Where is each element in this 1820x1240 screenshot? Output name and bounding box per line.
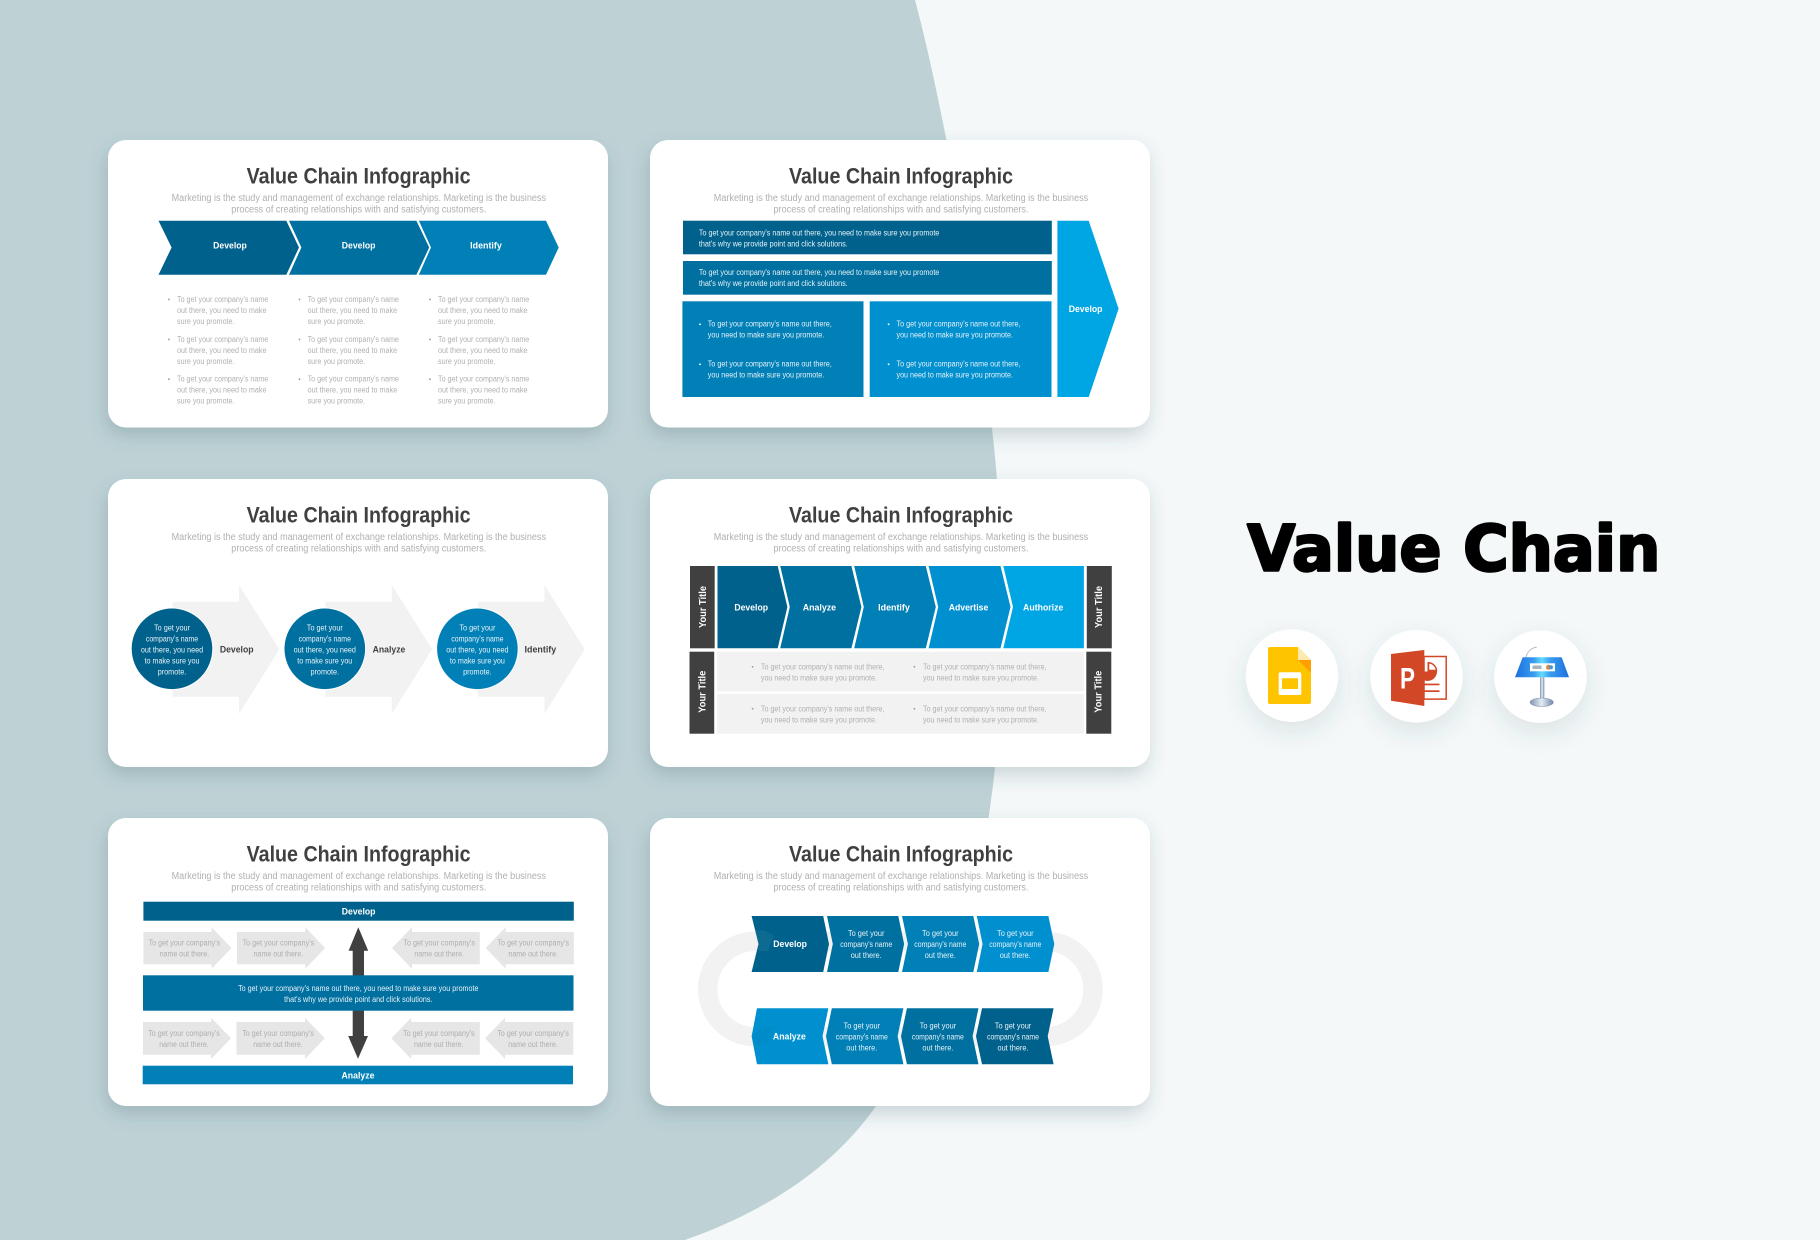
panel: card 4 five chevrons table xyxy=(650,479,1150,767)
grey loop xyxy=(708,941,1093,1037)
chevron: Analyze xyxy=(780,566,861,648)
panel: card 2 bars and large arrow xyxy=(650,140,1150,428)
intro text: process of creating relationships with and satisfying customers. xyxy=(231,544,486,555)
chevron: Develop second xyxy=(289,221,429,275)
bar: Develop xyxy=(143,902,574,921)
chevron: top step 1: out there. xyxy=(851,951,882,960)
intro text xyxy=(714,193,1088,216)
panel: card 5 bars with central double arrow xyxy=(108,818,608,1106)
grey arrow bottom 4 xyxy=(485,1018,573,1059)
bar: Analyze: Analyze xyxy=(342,1070,374,1081)
side label top left xyxy=(690,566,715,648)
step: Identify: to make sure you xyxy=(450,656,505,665)
side label top right xyxy=(1087,566,1112,648)
chevron: bottom step 3: company's name xyxy=(987,1033,1039,1042)
chevron: top step 2 xyxy=(902,916,979,972)
box left: you need to make sure you promote. xyxy=(708,371,824,380)
intro text xyxy=(172,193,546,216)
intro text: Marketing is the study and management of exchange relationships. Marketing is the business xyxy=(172,871,546,882)
intro text: Marketing is the study and management of exchange relationships. Marketing is the business xyxy=(714,871,1088,882)
bullets column 1: sure you promote. xyxy=(177,397,234,406)
heading: Value Chain Infographic xyxy=(789,163,1013,188)
bullets column 2: out there, you need to make xyxy=(308,386,398,395)
chevron: Analyze xyxy=(752,1008,828,1064)
step: Develop xyxy=(131,585,279,714)
chevron: Analyze: Analyze xyxy=(803,602,836,613)
chevron: bottom step 1 xyxy=(826,1008,903,1064)
step: Analyze: out there, you need xyxy=(294,645,356,654)
chevron: Identify: Identify xyxy=(878,602,911,613)
step: Analyze: Analyze xyxy=(373,644,405,655)
bar: Develop: Develop xyxy=(342,906,376,917)
intro text: Marketing is the study and management of exchange relationships. Marketing is the business xyxy=(172,532,546,543)
panel: card 6 loop of chevrons xyxy=(650,818,1150,1106)
step: Develop: Develop xyxy=(220,644,254,655)
step: Develop: company's name xyxy=(146,634,199,643)
step: Analyze: promote. xyxy=(310,667,339,676)
step: Develop: to make sure you xyxy=(144,656,200,665)
heading: Value Chain Infographic xyxy=(789,841,1013,866)
icon: Keynote xyxy=(1494,630,1587,723)
bullets column 1: sure you promote. xyxy=(177,357,234,366)
bar 2: that's why we provide point and click solutions. xyxy=(699,279,848,288)
bullets column 2: sure you promote. xyxy=(308,317,365,326)
side label top left: Your Title xyxy=(698,586,709,628)
bar: centre message: that's why we provide point and click solutions. xyxy=(284,995,432,1004)
grey arrow top 4 xyxy=(486,927,574,969)
grey arrow top 1: name out there. xyxy=(160,950,209,959)
grey arrow top 3: To get your company's xyxy=(403,939,475,948)
grey arrow bottom 3: To get your company's xyxy=(403,1029,475,1038)
bullets column 1 xyxy=(168,295,269,406)
chevron: Advertise: Advertise xyxy=(949,602,988,613)
chevron: top step 3: out there. xyxy=(1000,951,1031,960)
box left: you need to make sure you promote. xyxy=(708,331,824,340)
bullets column 3: To get your company's name xyxy=(438,335,530,344)
bullets column 3: To get your company's name xyxy=(438,375,530,384)
chevron: top step 1: To get your xyxy=(848,929,885,938)
arrow: vertical double arrow xyxy=(348,927,368,1059)
grey arrow top 4: name out there. xyxy=(508,950,558,959)
grey row 1: you need to make sure you promote. xyxy=(761,673,877,682)
grey row 2: To get your company's name out there, xyxy=(923,704,1047,713)
intro text: Marketing is the study and management of exchange relationships. Marketing is the business xyxy=(714,532,1088,543)
panel: card 3 circles on grey arrows xyxy=(108,479,608,767)
grey row 2: To get your company's name out there, xyxy=(761,704,884,713)
box left xyxy=(682,301,864,397)
box left: To get your company's name out there, xyxy=(708,320,832,329)
step: Identify: Identify xyxy=(525,644,557,655)
heading: Value Chain Infographic xyxy=(789,502,1013,527)
bar: centre message: To get your company's name out there, you need to make sure you promote xyxy=(238,984,479,993)
grey arrow bottom 3 xyxy=(391,1018,480,1059)
step: Develop: promote. xyxy=(158,667,186,676)
bar 2: To get your company's name out there, you need to make sure you promote xyxy=(699,268,940,277)
main title: Value Chain xyxy=(1247,512,1660,586)
bullets column 1: To get your company's name xyxy=(177,295,269,304)
intro text xyxy=(714,532,1088,555)
grey arrow top 4: To get your company's xyxy=(497,939,569,948)
grey arrow top 1: To get your company's xyxy=(149,939,220,948)
bullets column 3: sure you promote. xyxy=(438,317,496,326)
bar 2 xyxy=(683,261,1052,295)
grey arrow bottom 2: name out there. xyxy=(253,1040,303,1049)
grey row 2: you need to make sure you promote. xyxy=(923,715,1039,724)
intro text: process of creating relationships with and satisfying customers. xyxy=(774,205,1028,216)
grey arrow bottom 1 xyxy=(143,1018,231,1059)
bullets column 1: To get your company's name xyxy=(177,335,269,344)
step: Analyze xyxy=(284,585,432,714)
background blob xyxy=(0,0,1000,1240)
chevron: bottom step 2: To get your xyxy=(920,1022,956,1031)
bullets column 2: sure you promote. xyxy=(308,397,365,406)
arrow: Develop: Develop xyxy=(1069,304,1103,315)
chevron: Develop: Develop xyxy=(773,939,807,950)
bullets column 3: To get your company's name xyxy=(438,295,530,304)
grey row 1: you need to make sure you promote. xyxy=(923,673,1039,682)
chevron: bottom step 2: out there. xyxy=(922,1044,953,1053)
chevron: Develop: Develop xyxy=(734,602,768,613)
bullets column 3: out there, you need to make xyxy=(438,346,528,355)
icon: Google Slides xyxy=(1246,629,1338,722)
bullets column 3: sure you promote. xyxy=(438,397,496,406)
side label bottom right xyxy=(1086,652,1111,734)
bullets column 3: out there, you need to make xyxy=(438,306,528,315)
grey arrow bottom 1: To get your company's xyxy=(148,1029,220,1038)
grey arrow bottom 2 xyxy=(236,1018,325,1059)
step: Identify: out there, you need xyxy=(446,645,509,654)
grey arrow bottom 4: To get your company's xyxy=(497,1029,569,1038)
chevron: Authorize xyxy=(1003,566,1084,648)
panel: card 1 three chevrons with bullets xyxy=(108,140,608,428)
heading: Value Chain Infographic xyxy=(247,502,471,527)
chevron: Develop xyxy=(718,566,787,648)
bullets column 1: out there, you need to make xyxy=(177,386,267,395)
intro text: process of creating relationships with and satisfying customers. xyxy=(774,883,1028,894)
intro text xyxy=(714,871,1088,894)
bar 1: To get your company's name out there, you need to make sure you promote xyxy=(699,228,940,237)
bullets column 2: sure you promote. xyxy=(308,357,365,366)
side label bottom right: Your Title xyxy=(1094,670,1104,713)
chevron: bottom step 2: company's name xyxy=(912,1033,964,1042)
bar 1 xyxy=(683,221,1052,254)
step: Analyze: to make sure you xyxy=(297,656,352,665)
chevron: top step 2: To get your xyxy=(922,929,959,938)
bullets column 1: out there, you need to make xyxy=(177,346,267,355)
bullets column 3: out there, you need to make xyxy=(438,386,528,395)
bullets column 1: sure you promote. xyxy=(177,317,234,326)
step: Identify xyxy=(437,585,585,714)
chevron: top step 1 xyxy=(827,916,904,972)
intro text: process of creating relationships with and satisfying customers. xyxy=(231,883,486,894)
intro text xyxy=(172,871,546,894)
grey row 1: To get your company's name out there, xyxy=(923,662,1047,671)
heading: Value Chain Infographic xyxy=(247,163,471,188)
box left: To get your company's name out there, xyxy=(708,360,832,369)
chevron: Develop second: Develop xyxy=(342,240,376,251)
bullets column 1: out there, you need to make xyxy=(177,306,267,315)
chevron: Identify: Identify xyxy=(470,240,503,251)
icon: PowerPoint: P xyxy=(1400,662,1415,695)
step: Develop: To get your xyxy=(154,623,190,632)
chevron: Identify xyxy=(854,566,936,648)
bullets column 2: out there, you need to make xyxy=(308,306,398,315)
chevron: Develop xyxy=(158,221,299,275)
chevron: top step 3 xyxy=(977,916,1054,972)
grey arrow top 3: name out there. xyxy=(414,950,464,959)
chevron: bottom step 3 xyxy=(976,1008,1054,1064)
intro text: process of creating relationships with and satisfying customers. xyxy=(231,205,486,216)
grey arrow bottom 4: name out there. xyxy=(508,1040,558,1049)
chevron: Identify xyxy=(419,221,559,275)
chevron: top step 3: To get your xyxy=(997,929,1034,938)
bar: centre message xyxy=(143,975,574,1011)
arrow: Develop xyxy=(1057,221,1119,397)
chevron: top step 2: out there. xyxy=(925,951,956,960)
chevron: bottom step 1: company's name xyxy=(836,1033,888,1042)
step: Develop: out there, you need xyxy=(141,645,203,654)
bullets column 2 xyxy=(299,295,399,406)
chevron: top step 2: company's name xyxy=(914,940,967,949)
bar: Analyze xyxy=(143,1066,573,1084)
intro text xyxy=(172,532,546,555)
box right: To get your company's name out there, xyxy=(896,360,1020,369)
bullets column 3: sure you promote. xyxy=(438,357,496,366)
step: Identify: company's name xyxy=(451,634,504,643)
grey arrow top 2 xyxy=(237,927,325,969)
intro text: process of creating relationships with and satisfying customers. xyxy=(774,544,1028,555)
chevron: top step 3: company's name xyxy=(989,940,1042,949)
intro text: Marketing is the study and management of exchange relationships. Marketing is the business xyxy=(172,193,546,204)
side label top right: Your Title xyxy=(1094,586,1105,628)
chevron: top step 1: company's name xyxy=(840,940,893,949)
icon: PowerPoint xyxy=(1370,630,1463,723)
grey row 2 xyxy=(717,694,1084,734)
grey row 2: you need to make sure you promote. xyxy=(761,715,877,724)
bullets column 3 xyxy=(429,295,530,406)
grey arrow bottom 3: name out there. xyxy=(414,1040,464,1049)
chevron: bottom step 1: out there. xyxy=(846,1044,877,1053)
box right xyxy=(870,301,1052,397)
grey row 1 xyxy=(717,652,1084,691)
box right: To get your company's name out there, xyxy=(896,320,1020,329)
side label bottom left: Your Title xyxy=(698,670,708,713)
grey row 1: To get your company's name out there, xyxy=(761,662,884,671)
bullets column 2: To get your company's name xyxy=(308,335,399,344)
box right: you need to make sure you promote. xyxy=(896,371,1013,380)
grey arrow top 2: name out there. xyxy=(254,950,303,959)
step: Identify: To get your xyxy=(459,623,496,632)
bullets column 1: To get your company's name xyxy=(177,375,269,384)
chevron: bottom step 2 xyxy=(901,1008,978,1064)
grey arrow top 2: To get your company's xyxy=(243,939,314,948)
grey arrow top 1 xyxy=(143,927,232,969)
step: Identify: promote. xyxy=(463,667,492,676)
grey arrow bottom 1: name out there. xyxy=(159,1040,209,1049)
heading: Value Chain Infographic xyxy=(247,841,471,866)
step: Analyze: company's name xyxy=(299,634,351,643)
chevron: bottom step 3: out there. xyxy=(998,1044,1028,1053)
chevron: Authorize: Authorize xyxy=(1023,602,1063,613)
bar 1: that's why we provide point and click solutions. xyxy=(699,239,848,248)
box right: you need to make sure you promote. xyxy=(896,331,1013,340)
chevron: Develop: Develop xyxy=(213,240,247,251)
chevron: Analyze: Analyze xyxy=(773,1032,806,1043)
bullets column 2: To get your company's name xyxy=(308,375,399,384)
chevron: bottom step 1: To get your xyxy=(844,1022,880,1031)
intro text: Marketing is the study and management of exchange relationships. Marketing is the business xyxy=(714,193,1088,204)
side label bottom left xyxy=(690,652,714,734)
step: Analyze: To get your xyxy=(307,623,343,632)
bullets column 2: out there, you need to make xyxy=(308,346,398,355)
grey arrow bottom 2: To get your company's xyxy=(242,1029,314,1038)
chevron: bottom step 3: To get your xyxy=(995,1022,1032,1031)
bullets column 2: To get your company's name xyxy=(308,295,399,304)
chevron: Advertise xyxy=(929,566,1010,648)
chevron: Develop xyxy=(752,916,829,972)
grey arrow top 3 xyxy=(392,927,480,969)
